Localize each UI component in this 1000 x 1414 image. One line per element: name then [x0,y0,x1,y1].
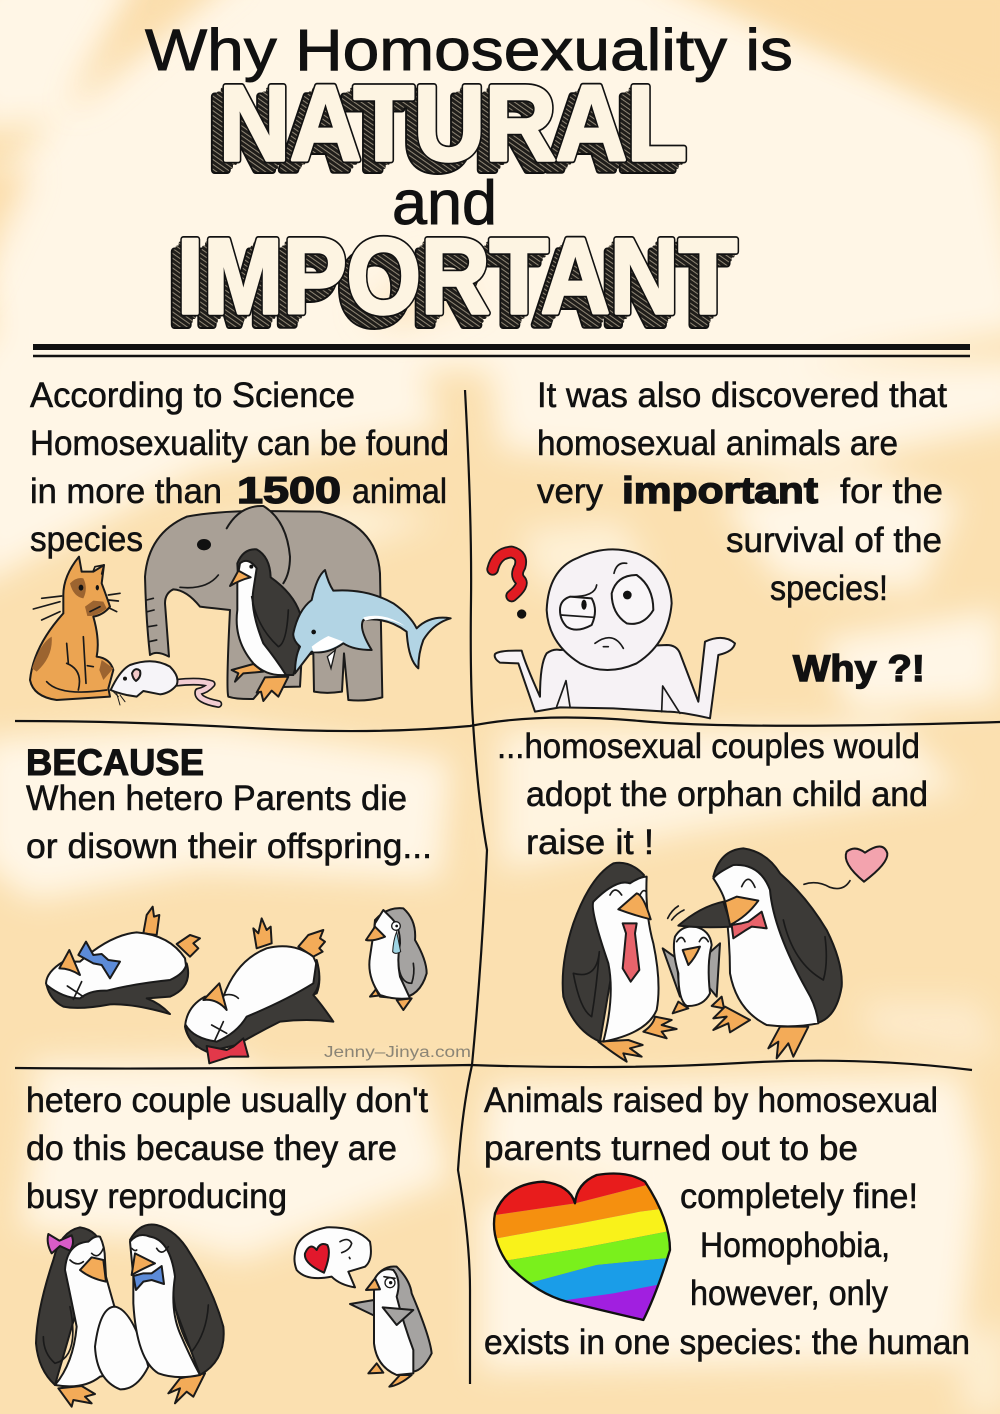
text: animals raised: however, only [690,1274,888,1313]
icon: dolphin [293,570,451,673]
text: it was also discovered: very [537,472,603,511]
panel: hetero couple busy [26,1081,432,1407]
title word: IMPORTANT: IMPORTANT [171,224,731,344]
icon: egg [95,1307,148,1389]
icon: rainbow heart [492,1172,672,1322]
text: hetero couple usually [26,1081,428,1216]
text: homosexual couples would: ...homosexual couples would [497,727,920,766]
icon: question mark [493,552,526,619]
text: it was also discovered: It was also discovered that [537,376,947,415]
text: when hetero parents die: or disown their offspring... [26,827,432,866]
text: animals raised: Homophobia, [700,1226,890,1265]
title word: IMPORTANT: IMPORTANT [168,228,728,348]
illustration: penguin couple and confused chick [36,1224,432,1407]
text: hetero couple usually: busy reproducing [26,1177,287,1216]
text: animals raised [484,1081,970,1362]
title word: NATURAL: NATURAL [208,73,676,193]
title word: NATURAL: NATURAL [219,63,687,183]
text: because heading: BECAUSE [26,742,204,783]
icon: floating heart [804,846,887,889]
panel: because [26,742,471,1063]
text: it was also discovered: for the [840,472,943,511]
illustration: penguin family [563,846,887,1062]
icon: penguin with pink bow [36,1227,133,1407]
icon: penguin with bow tie [678,848,842,1058]
text: animals raised: completely fine! [680,1177,918,1216]
panel: 1500 species [30,376,451,705]
panel: raised fine, homophobia [480,1081,970,1362]
illustration: shrugging figure [493,549,735,718]
title word: IMPORTANT: IMPORTANT [168,228,728,348]
text: it was also discovered: homosexual animals are [537,424,898,463]
icon: penguin [230,549,300,701]
text: according to science: in more than [30,472,222,511]
title word: IMPORTANT: IMPORTANT [174,220,734,340]
text: it was also discovered: important [622,470,818,511]
text: according to science: 1500 [237,470,341,511]
icon: penguin with tie [563,863,677,1062]
text: homosexual couples would [497,727,928,862]
title word: IMPORTANT: IMPORTANT [177,216,737,336]
panel: adopt orphan [497,727,928,1062]
title [145,18,793,348]
text: when hetero parents die [26,779,432,866]
text: it was also discovered: species! [770,569,888,608]
text: homosexual couples would: adopt the orphan child and [526,775,928,814]
icon: speech bubble with heart [294,1227,371,1287]
text: animals raised: Animals raised by homosexual [484,1081,938,1120]
icon: confused chick [350,1266,432,1387]
illustration: dead penguins and crying chick [46,907,427,1063]
title word: NATURAL: NATURAL [216,66,684,186]
text: hetero couple usually: hetero couple usually don't [26,1081,428,1120]
text: according to science: species [30,520,143,559]
panel: important for survival [493,376,947,718]
text: animals raised: parents turned out to be [484,1129,858,1168]
text: hetero couple usually: do this because they are [26,1129,397,1168]
icon: elephant [145,506,382,700]
icon: cat [30,557,120,700]
animals illustration [30,506,451,705]
text: why: Why ?! [793,648,925,689]
text: homosexual couples would: raise it ! [526,823,654,862]
icon: dead penguin with red bow [185,918,333,1063]
text: animals raised: exists in one species: the human [484,1323,970,1362]
title word: NATURAL: NATURAL [208,73,676,193]
text: according to science [30,376,449,559]
text: according to science: According to Science [30,376,355,415]
text: according to science: Homosexuality can be found [30,424,449,463]
icon: crying chick [366,908,427,1010]
text: according to science: animal [352,472,447,511]
icon: chick [663,906,724,1013]
icon: body [495,638,735,718]
title line: Why Homosexuality is: Why Homosexuality is [145,18,793,83]
text: it was also discovered [537,376,947,608]
title word: NATURAL: NATURAL [212,70,680,190]
title word: and: and [392,169,497,238]
icon: mouse [111,661,218,705]
icon: penguin with blue bow [130,1224,224,1403]
title word: IMPORTANT: IMPORTANT [177,216,737,336]
icon: dead penguin with bow [46,907,200,1014]
title word: NATURAL: NATURAL [219,63,687,183]
text: when hetero parents die: When hetero Parents die [26,779,407,818]
icon: head [547,549,672,670]
text: it was also discovered: survival of the [726,521,942,560]
text: watermark: Jenny–Jinya.com [324,1044,471,1061]
